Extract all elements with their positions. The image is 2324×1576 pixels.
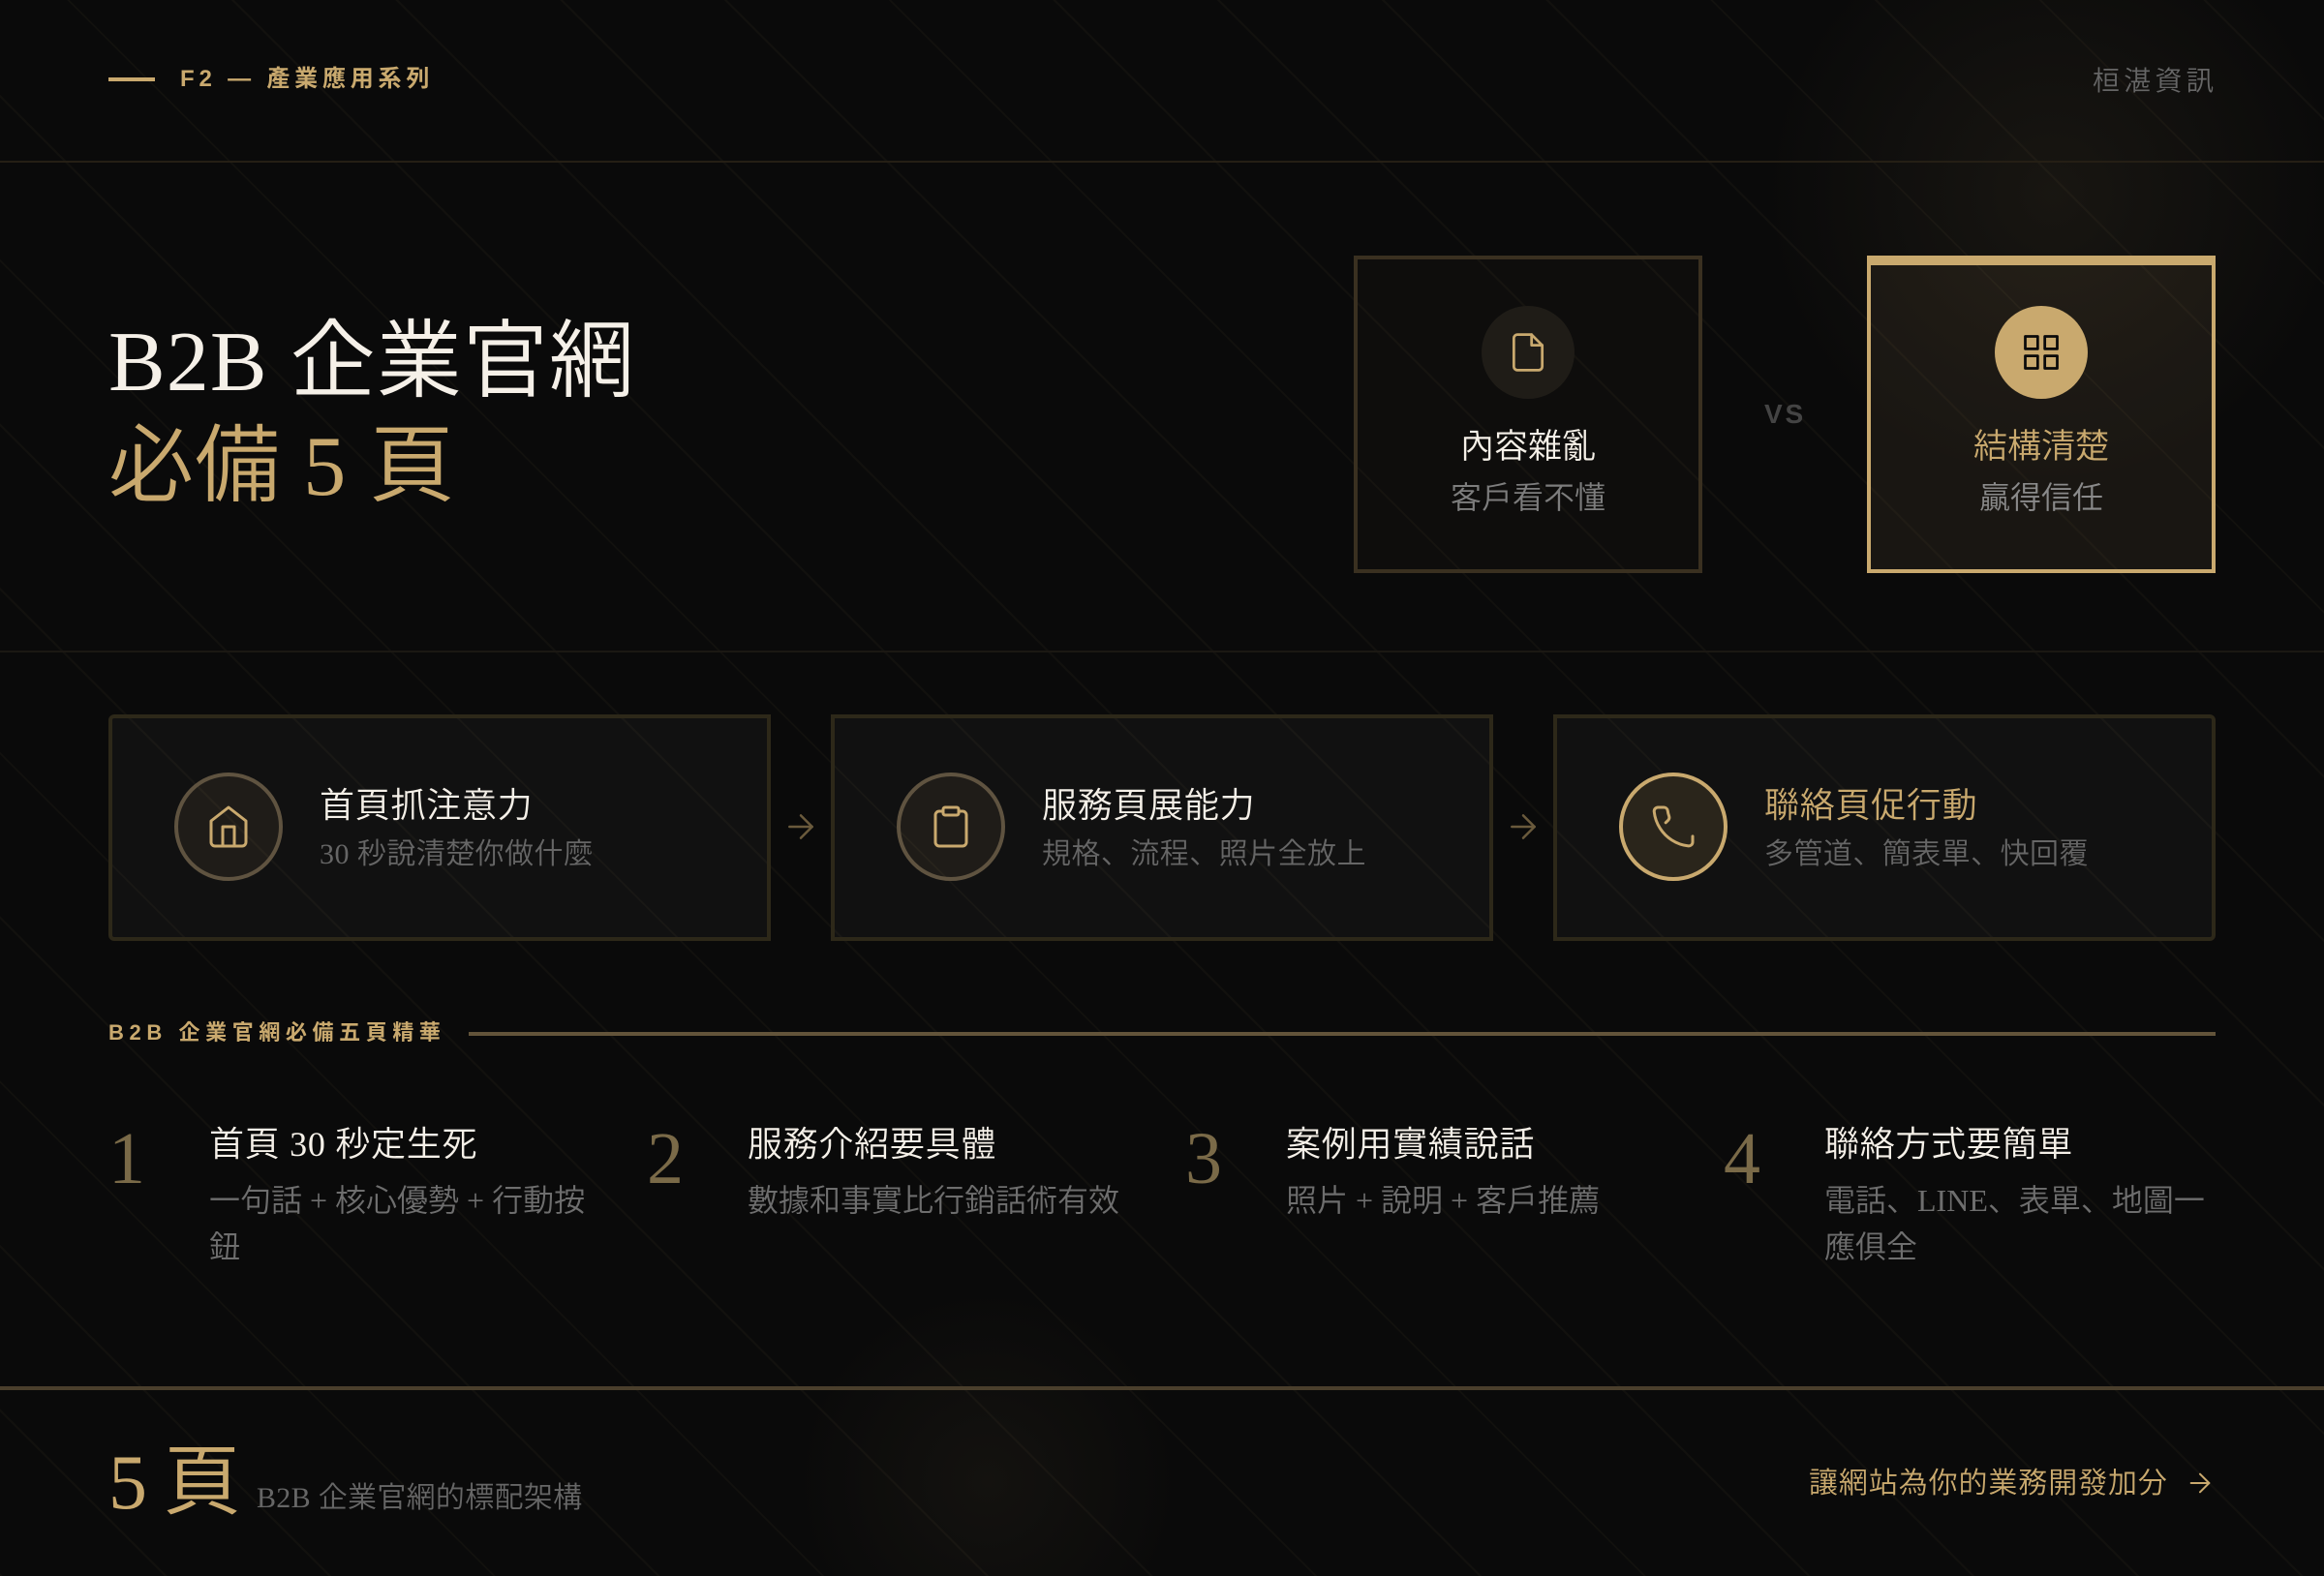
arrow: services to contact — [1511, 814, 1536, 839]
takeaway heading: 首頁 30 秒定生死 — [209, 1125, 477, 1164]
title: 必備 5 頁 — [108, 420, 456, 514]
number 1: 1 — [108, 1118, 145, 1199]
takeaway heading: 服務介紹要具體 — [748, 1125, 996, 1164]
call to action: 讓網站為你的業務開發加分 — [1809, 1468, 2168, 1500]
takeaway text: 數據和事實比行銷話術有效 — [748, 1183, 1119, 1218]
section heading rule — [469, 1032, 2216, 1036]
comparison card: clear structure — [1867, 256, 2216, 573]
number 4: 4 — [1724, 1118, 1760, 1199]
icon: phone — [1619, 773, 1728, 881]
icon: clipboard — [897, 773, 1005, 881]
process card: contact page — [1553, 714, 2216, 941]
section heading: B2B 企業官網必備五頁精華 — [108, 1020, 446, 1045]
title — [108, 316, 635, 514]
takeaway text — [209, 1183, 585, 1264]
card subtext: 贏得信任 — [1979, 480, 2103, 515]
takeaway 4 — [1724, 1118, 2205, 1264]
title: B2B 企業官網 — [108, 316, 635, 409]
takeaway heading: 聯絡方式要簡單 — [1824, 1125, 2073, 1164]
card heading: 結構清楚 — [1973, 428, 2109, 466]
card heading: 聯絡頁促行動 — [1764, 786, 1977, 825]
takeaway text: 電話、LINE、表單、地圖一 — [1824, 1183, 2205, 1218]
header divider — [0, 161, 2324, 163]
number 3: 3 — [1185, 1118, 1222, 1199]
takeaway heading: 案例用實績說話 — [1286, 1125, 1535, 1164]
comparison card: messy content — [1354, 256, 1702, 573]
card subtext: 多管道、簡表單、快回覆 — [1764, 838, 2089, 870]
takeaway text: 應俱全 — [1824, 1229, 1917, 1264]
takeaway 1 — [108, 1118, 585, 1264]
takeaway 2 — [647, 1118, 1119, 1218]
arrow: home to services — [788, 814, 813, 839]
takeaway 3 — [1185, 1118, 1600, 1218]
number 2: 2 — [647, 1118, 684, 1199]
process card: home page — [108, 714, 771, 941]
eyebrow label: F2 — 產業應用系列 — [180, 66, 434, 92]
card heading: 服務頁展能力 — [1042, 786, 1255, 825]
footer divider — [0, 1386, 2324, 1390]
takeaway text: 一句話 + 核心優勢 + 行動按 — [209, 1183, 585, 1218]
vs label: VS — [1764, 399, 1806, 429]
footer stat: 5 頁 — [108, 1440, 239, 1526]
card subtext: 規格、流程、照片全放上 — [1042, 838, 1366, 870]
footer stat caption: B2B 企業官網的標配架構 — [257, 1482, 582, 1514]
hero divider — [0, 651, 2324, 652]
process card: services page — [831, 714, 1493, 941]
icon: document — [1482, 306, 1575, 399]
arrow: call to action — [2190, 1473, 2210, 1493]
takeaway text: 照片 + 說明 + 客戶推薦 — [1286, 1183, 1600, 1218]
card subtext: 30 秒說清楚你做什麼 — [320, 838, 593, 870]
takeaway text: 鈕 — [209, 1229, 240, 1264]
brand name: 桓湛資訊 — [2093, 67, 2217, 97]
card heading: 首頁抓注意力 — [320, 786, 533, 825]
card subtext: 客戶看不懂 — [1451, 480, 1605, 515]
card heading: 內容雜亂 — [1460, 428, 1596, 466]
icon: home — [174, 773, 283, 881]
takeaway text — [1824, 1183, 2205, 1264]
eyebrow accent line — [108, 77, 155, 81]
icon: grid — [1995, 306, 2088, 399]
